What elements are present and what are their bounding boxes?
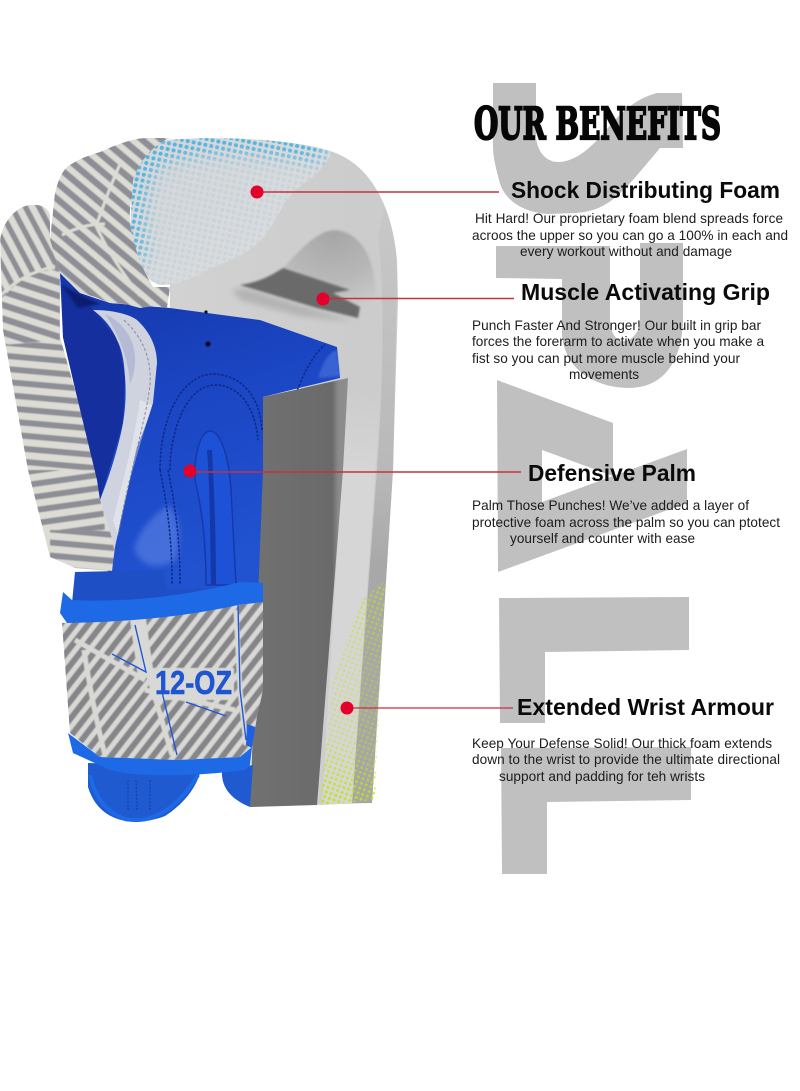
description — [472, 736, 780, 784]
thumb lining — [93, 310, 157, 547]
size label: 12-OZ — [155, 664, 232, 701]
pointer — [250, 186, 499, 198]
description: every workout without and damage — [520, 244, 732, 259]
description: Keep Your Defense Solid! Our thick foam extends — [472, 736, 772, 751]
description: Hit Hard! Our proprietary foam blend spreads force — [475, 211, 783, 226]
ventilation holes — [205, 341, 211, 347]
wrist strap top binding — [60, 582, 263, 623]
pointer — [340, 702, 513, 714]
dark foam palm padding — [250, 378, 348, 807]
background letter A — [497, 380, 687, 572]
description: fist so you can put more muscle behind your — [472, 351, 740, 366]
background letter S — [493, 83, 683, 214]
callout: shock distributing foam — [250, 177, 788, 259]
description: movements — [569, 367, 639, 382]
blue palm interior — [60, 273, 340, 590]
description — [472, 318, 764, 382]
callout: muscle activating grip — [316, 279, 770, 382]
infographic canvas — [0, 83, 788, 874]
grip bar — [232, 268, 360, 322]
background letter U — [496, 243, 683, 388]
description: protective foam across the palm so you can ptotect — [472, 515, 780, 530]
background letter L lower — [501, 747, 691, 874]
mid blue panel above strap — [72, 570, 263, 603]
glove cuff bottom — [88, 763, 253, 822]
shock distributing foam face — [130, 138, 333, 285]
heading: Extended Wrist Armour — [517, 694, 774, 720]
finger ridge — [195, 431, 236, 585]
heading: Defensive Palm — [528, 460, 696, 486]
description: Palm Those Punches! We’ve added a layer of — [472, 498, 749, 513]
foam body — [167, 138, 398, 807]
pointer — [184, 464, 521, 478]
inner arch shadow — [283, 230, 375, 310]
thumb fabric — [0, 200, 120, 575]
palm stitching — [160, 345, 325, 585]
description: down to the wrist to provide the ultimate directional — [472, 752, 780, 767]
description — [472, 498, 780, 546]
description: support and padding for teh wrists — [499, 769, 705, 784]
heading: Shock Distributing Foam — [511, 177, 780, 203]
description — [472, 211, 788, 259]
background letter L upper — [499, 597, 689, 723]
wrist strap bottom binding — [68, 733, 252, 775]
callout: defensive palm — [184, 460, 780, 546]
knuckle fabric — [50, 138, 170, 308]
description: acroos the upper so you can go a 100% in each and — [472, 228, 788, 243]
description: forces the forerarm to activate when you make a — [472, 334, 764, 349]
description: yourself and counter with ease — [510, 531, 695, 546]
boxing glove cross-section — [0, 130, 398, 822]
description: Punch Faster And Stronger! Our built in grip bar — [472, 318, 761, 333]
callout: extended wrist armour — [340, 694, 780, 784]
heading: Muscle Activating Grip — [521, 279, 770, 305]
pointer — [316, 292, 514, 306]
wrist band — [55, 600, 265, 765]
